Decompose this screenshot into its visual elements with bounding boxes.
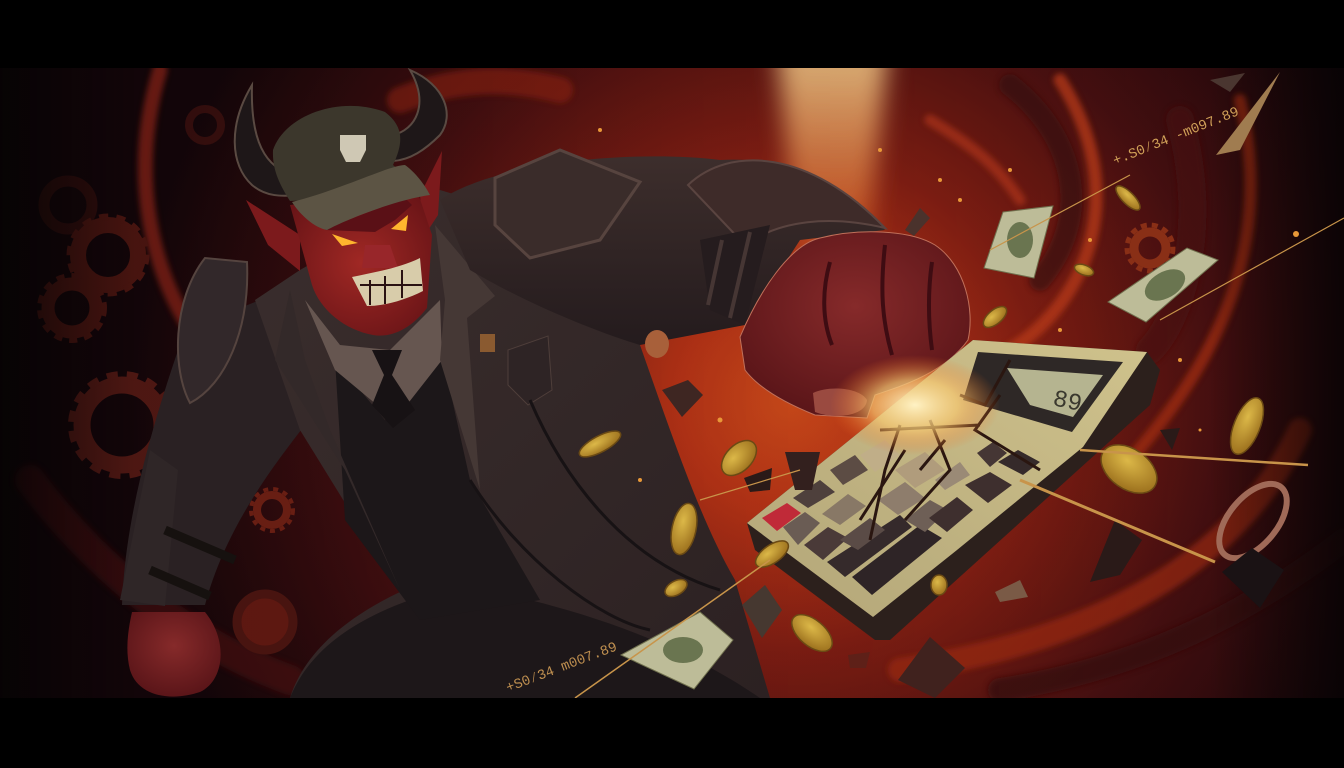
lapel left [275,290,400,590]
coins [576,182,1270,658]
coat panel lines [470,400,720,630]
icon: gears left [40,109,1173,650]
floating figures top right: +.S0⁄34 -m097.89 [1111,104,1242,170]
lapel right [435,225,495,490]
display digits: 89 [1050,386,1084,419]
calculator body side [747,340,1160,640]
cap [273,106,430,201]
horns [235,85,303,196]
debris [645,72,1284,698]
skull emblem [340,135,366,162]
left fist [127,612,221,697]
calculator face [747,340,1147,617]
demon head [235,70,447,336]
calculator [747,340,1160,640]
cracks [860,360,1040,540]
shirt [305,300,442,420]
banknotes [621,206,1218,689]
letterbox bar top [0,0,1344,68]
badge [508,336,552,405]
ring [1206,472,1300,570]
coat [255,190,770,698]
trousers [290,600,760,698]
brow shadow [325,198,412,232]
eyes [332,234,358,246]
display screen [1007,368,1103,417]
light beam [775,30,890,340]
right fist [740,232,970,418]
left arm [120,258,305,697]
impact flash [830,355,1000,455]
ears [246,200,300,271]
cap brim [292,165,430,230]
nose [362,245,398,268]
display frame [963,352,1123,432]
letterbox bar bottom [0,698,1344,768]
sparks [598,128,1299,482]
pin [480,334,495,352]
swirl bands [30,70,1344,690]
keys [762,440,1040,595]
tie [372,350,415,428]
vest [335,345,540,620]
face [290,190,432,336]
right arm and shoulder armour [440,150,885,345]
streaks [575,175,1344,698]
mouth [352,258,423,306]
demon body [255,190,770,698]
floating figures bottom: +S0⁄34 m007.89 [504,640,620,697]
